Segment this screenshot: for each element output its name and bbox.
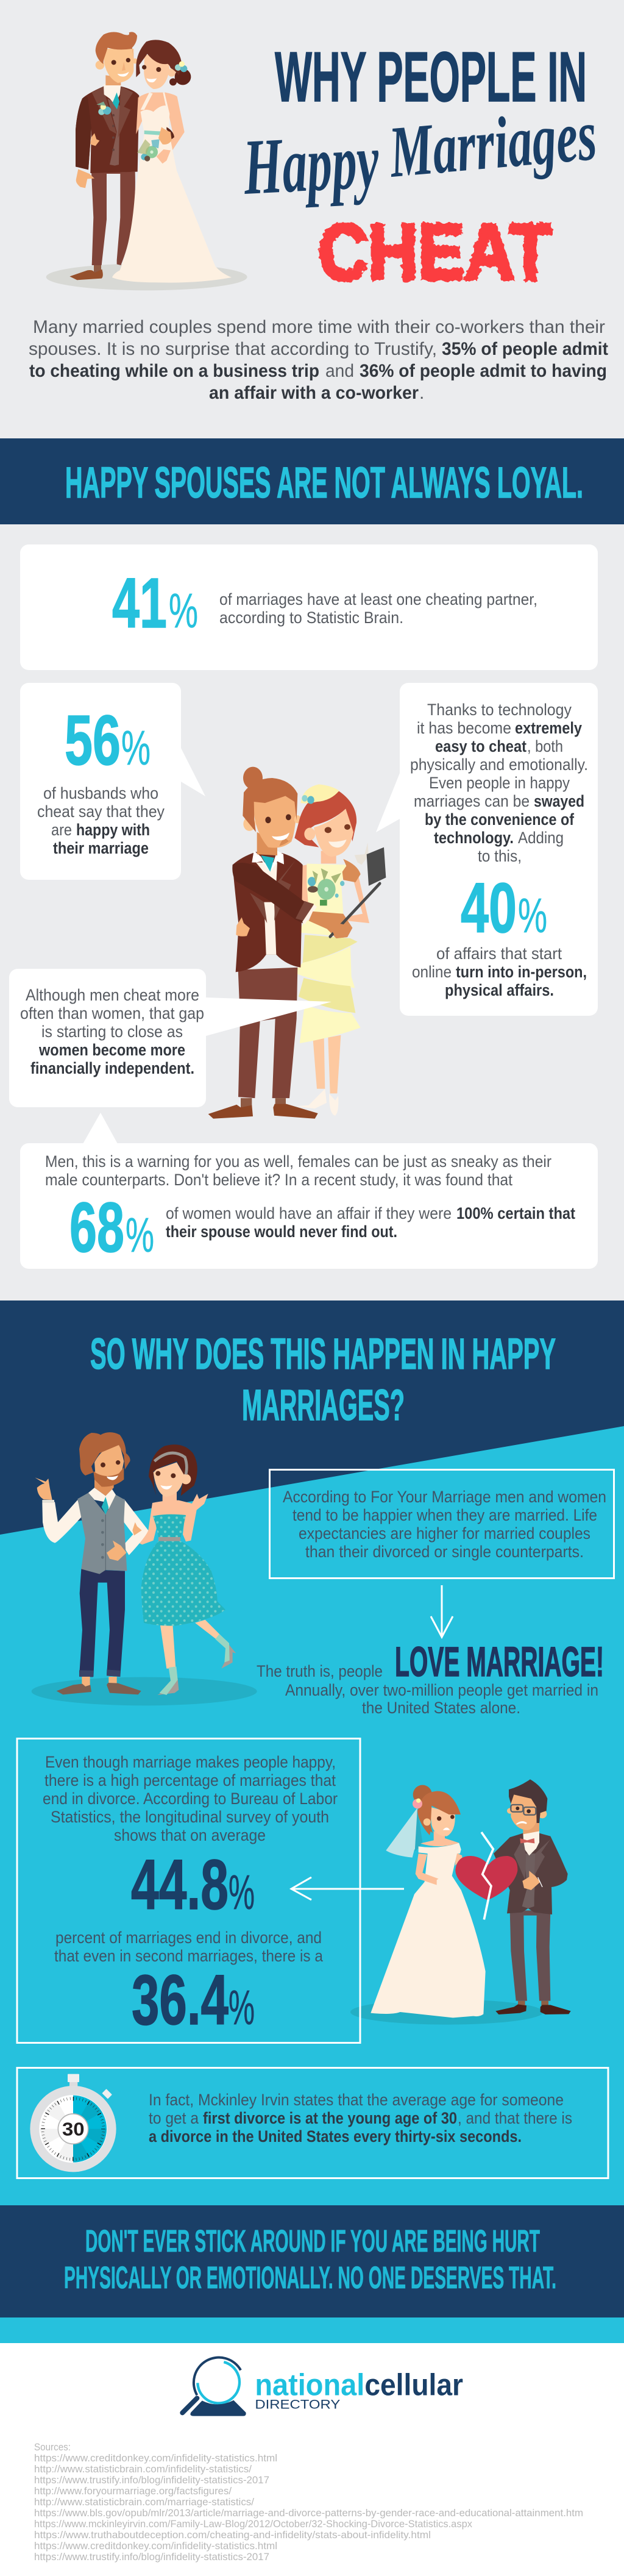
panel: divorce statistics: % — [229, 1865, 255, 1919]
sources list: https://www.trustify.info/blog/infidelity-statistics-2017 — [34, 2475, 269, 2486]
sources list: http://www.statisticbrain.com/infidelity-statistics/ — [34, 2464, 252, 2475]
panel: technology speech bubble: extremely — [515, 719, 582, 737]
panel: technology speech bubble: by the convenience of — [425, 810, 575, 829]
panel: technology speech bubble: physically and emotionally. — [410, 755, 588, 774]
arrow: left — [291, 1877, 404, 1900]
panel: 68 percent stat: 100% certain that — [456, 1204, 575, 1222]
panel: first divorce age: first divorce is at the young age of 30 — [203, 2109, 457, 2127]
panel: technology speech bubble: % — [518, 888, 547, 943]
panel: technology speech bubble: Adding — [518, 829, 564, 847]
illustration: happy couple — [32, 1432, 257, 1705]
panel: 68 percent stat: male counterparts. Don't believe it? In a recent study, it was found that — [45, 1171, 512, 1189]
panel: technology speech bubble: online — [412, 963, 452, 981]
section background: diagonal navy and cyan — [0, 1300, 624, 2343]
sources list: https://www.bls.gov/opub/mlr/2013/article/marriage-and-divorce-patterns-by-gender-race-and-educational-attainment.htm — [34, 2508, 583, 2519]
panel: first divorce age — [17, 2068, 608, 2178]
panel: technology speech bubble: it has become — [417, 719, 511, 737]
section heading: why does this happen: MARRIAGES? — [242, 1382, 405, 1430]
title — [241, 37, 600, 296]
panel: 41 percent stat: according to Statistic Brain. — [219, 608, 403, 627]
logo: national cellular directory: DIRECTORY — [255, 2397, 340, 2412]
panel: 68 percent stat: their spouse would never find out. — [166, 1222, 397, 1241]
panel: gender gap speech bubble — [9, 969, 332, 1107]
panel: divorce statistics: there is a high percentage of marriages that — [44, 1771, 336, 1789]
panel: 41 percent stat — [20, 544, 598, 670]
panel: technology speech bubble: swayed — [534, 792, 584, 810]
sources list: https://www.trustify.info/blog/infidelity-statistics-2017 — [34, 2552, 269, 2563]
panel: divorce statistics: end in divorce. According to Bureau of Labor — [43, 1789, 338, 1808]
panel: technology speech bubble: marriages can be — [414, 792, 530, 810]
panel: 68 percent stat: of women would have an affair if they were — [166, 1204, 452, 1222]
sources list — [34, 2442, 583, 2563]
panel: 68 percent stat: % — [126, 1208, 154, 1262]
panel: 56 percent speech bubble: are — [51, 821, 72, 839]
panel: divorce statistics: that even in second marriages, there is a — [54, 1947, 324, 1965]
panel: divorce statistics: 36.4 — [132, 1960, 229, 2039]
illustration: broken heart couple — [350, 1779, 571, 2025]
panel: gender gap speech bubble: Although men cheat more — [26, 986, 199, 1004]
arrow: down — [431, 1585, 453, 1637]
panel: for your marriage: than their divorced or single counterparts. — [305, 1543, 584, 1561]
panel: gender gap speech bubble: often than women, that gap — [20, 1004, 204, 1022]
logo: national cellular directory: national — [255, 2367, 364, 2402]
icon: stopwatch: 30 — [62, 2119, 85, 2139]
icon: stopwatch — [30, 2074, 116, 2172]
panel: divorce statistics: Statistics, the longitudinal survey of youth — [51, 1808, 329, 1826]
panel: divorce statistics: shows that on average — [114, 1826, 266, 1844]
text block: love marriage — [257, 1638, 604, 1717]
panel: first divorce age: a divorce in the United States every thirty-six seconds. — [149, 2127, 522, 2146]
panel: divorce statistics — [17, 1739, 360, 2043]
panel: first divorce age: , and that there is — [458, 2109, 572, 2127]
closing banner — [0, 2205, 624, 2317]
logo: national cellular directory — [182, 2358, 463, 2416]
panel: technology speech bubble: 40 — [461, 868, 517, 947]
panel: first divorce age: In fact, Mckinley Irvin states that the average age for someone — [149, 2091, 564, 2109]
intro paragraph: Many married couples spend more time with their co-workers than their — [33, 317, 605, 337]
panel: divorce statistics: 44.8 — [131, 1845, 229, 1924]
panel: 56 percent speech bubble: cheat say that they — [37, 802, 165, 821]
title line: cheat: CHEAT — [318, 207, 551, 296]
intro paragraph — [29, 317, 608, 403]
panel: 56 percent speech bubble: happy with — [76, 821, 150, 839]
panel: technology speech bubble: technology. — [434, 829, 514, 847]
section heading: why does this happen — [90, 1330, 556, 1430]
panel: 56 percent speech bubble: their marriage — [53, 839, 149, 857]
illustration: wedding couple — [46, 32, 247, 290]
panel: technology speech bubble: easy to cheat — [435, 737, 526, 755]
panel: technology speech bubble: Even people in happy — [429, 774, 570, 792]
panel: gender gap speech bubble: is starting to close as — [41, 1022, 183, 1041]
panel: technology speech bubble: physical affairs. — [445, 981, 554, 999]
intro paragraph: an affair with a co-worker — [209, 383, 419, 403]
sources list: http://www.statisticbrain.com/marriage-statistics/ — [34, 2497, 254, 2508]
panel: 68 percent stat — [20, 1113, 598, 1269]
panel: 68 percent stat: 68 — [69, 1188, 124, 1267]
panel: gender gap speech bubble: financially independent. — [30, 1059, 194, 1077]
panel: technology speech bubble — [376, 683, 598, 1016]
logo: national cellular directory: cellular — [364, 2367, 463, 2402]
panel: 41 percent stat: of marriages have at least one cheating partner, — [219, 590, 537, 608]
text block: love marriage: The truth is, people — [257, 1662, 383, 1680]
panel: technology speech bubble: Thanks to technology — [427, 701, 572, 719]
sources list: Sources: — [34, 2442, 71, 2453]
title script: happy: Happy — [241, 116, 381, 212]
panel: technology speech bubble: , both — [527, 737, 563, 755]
panel: 68 percent stat: Men, this is a warning for you as well, females can be just as sneaky as their — [45, 1152, 551, 1171]
panel: 41 percent stat: 41 — [112, 563, 167, 643]
sources list: https://www.creditdonkey.com/infidelity-statistics.html — [34, 2541, 277, 2552]
sources list: https://www.mckinleyirvin.com/Family-Law-Blog/2012/October/32-Shocking-Divorce-Statistics.aspx — [34, 2519, 473, 2530]
panel: technology speech bubble: turn into in-person, — [456, 963, 587, 981]
panel: 41 percent stat: % — [169, 583, 198, 638]
panel: 56 percent speech bubble: % — [121, 721, 151, 775]
panel: divorce statistics: % — [229, 1980, 255, 2035]
intro paragraph: to cheating while on a business trip — [29, 361, 319, 381]
illustration: selfie couple — [208, 767, 386, 1119]
intro paragraph: . — [419, 383, 424, 403]
panel: divorce statistics: percent of marriages end in divorce, and — [55, 1928, 322, 1947]
panel: for your marriage: tend to be happier when they are married. Life — [292, 1506, 597, 1524]
panel: for your marriage — [269, 1469, 614, 1578]
panel: 56 percent speech bubble — [20, 683, 205, 880]
sources list: http://www.foryourmarriage.org/factsfigures/ — [34, 2486, 232, 2497]
footer background — [0, 2343, 624, 2576]
panel: technology speech bubble: of affairs that start — [436, 944, 562, 963]
panel: divorce statistics: Even though marriage makes people happy, — [45, 1753, 336, 1771]
sources list: https://www.truthaboutdeception.com/cheating-and-infidelity/stats-about-infidelity.html — [34, 2530, 431, 2541]
panel: for your marriage: expectancies are higher for married couples — [299, 1524, 590, 1543]
panel: 56 percent speech bubble: 56 — [65, 701, 121, 780]
panel: 56 percent speech bubble: of husbands who — [43, 784, 158, 802]
text block: love marriage: the United States alone. — [362, 1699, 520, 1717]
intro paragraph: spouses. It is no surprise that according to Trustify, — [29, 339, 437, 359]
panel: first divorce age: to get a — [149, 2109, 199, 2127]
sources list: https://www.creditdonkey.com/infidelity-statistics.html — [34, 2453, 277, 2464]
panel: gender gap speech bubble: women become more — [38, 1041, 185, 1059]
text block: love marriage: Annually, over two-million people get married in — [285, 1681, 598, 1699]
intro paragraph: and — [325, 361, 354, 381]
panel: technology speech bubble: to this, — [478, 847, 522, 865]
section banner: happy spouses — [0, 438, 624, 524]
intro paragraph: 35% of people admit — [442, 339, 608, 359]
intro paragraph: 36% of people admit to having — [360, 361, 607, 381]
